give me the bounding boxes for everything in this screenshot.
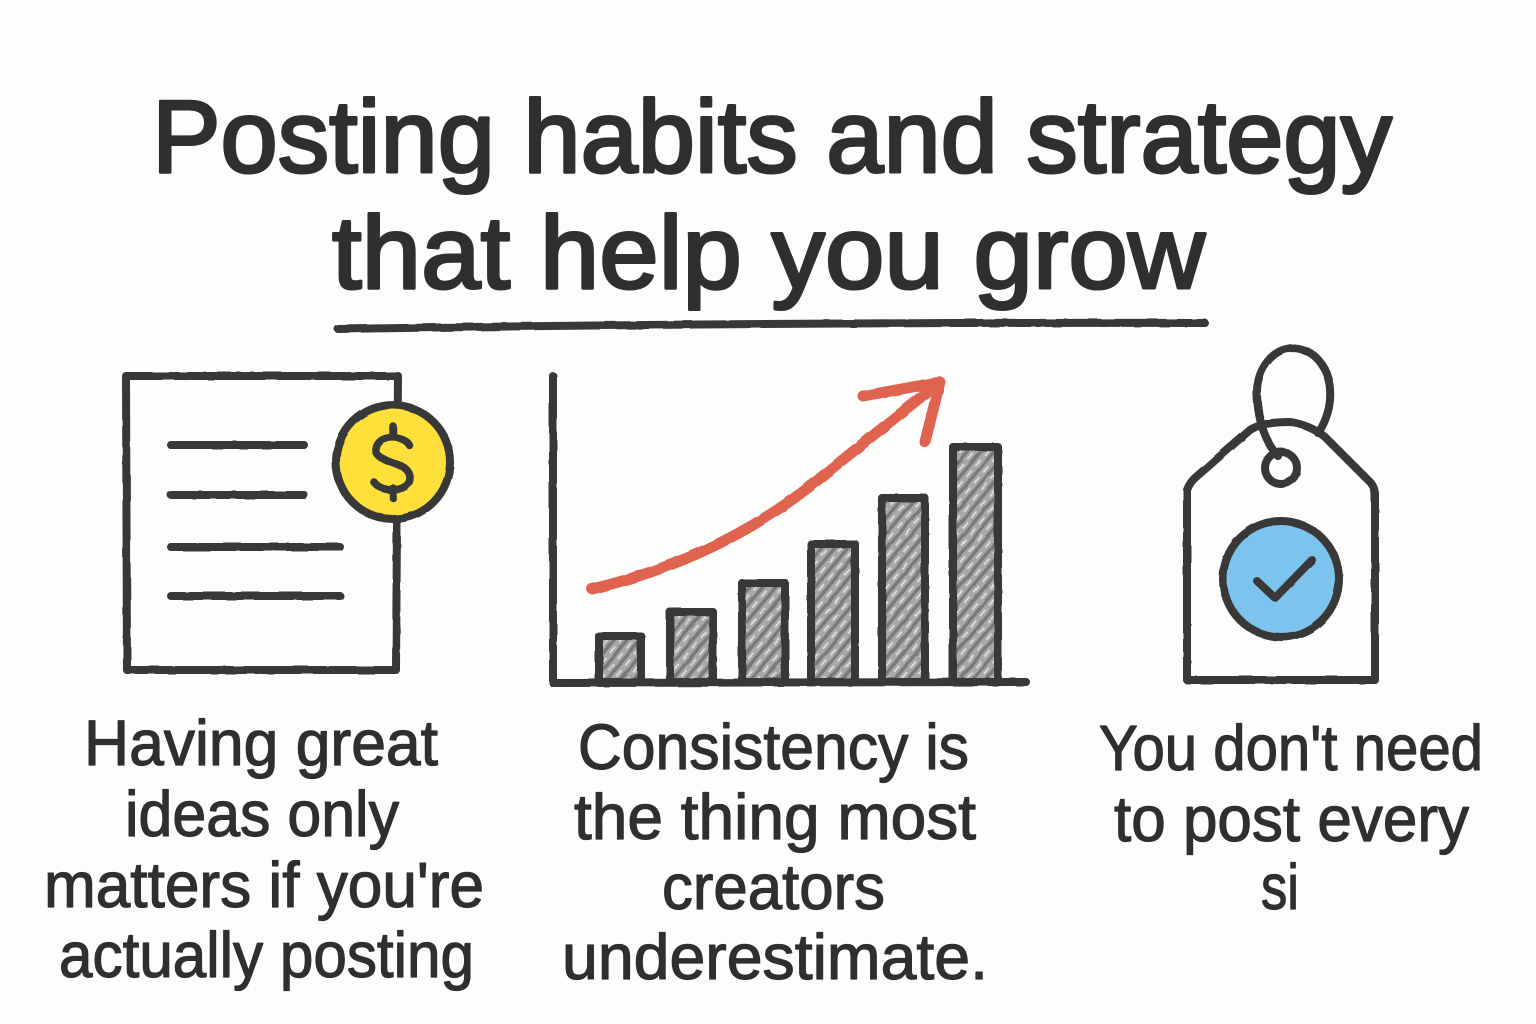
- caption: posting frequency: si: [1261, 851, 1299, 923]
- tag body: [1187, 422, 1375, 680]
- caption: consistency: underestimate.: [562, 921, 988, 993]
- caption: posting frequency: to post every: [1114, 783, 1469, 855]
- title: that help you grow: [332, 195, 1206, 310]
- caption: posting frequency: [1099, 712, 1483, 923]
- chart axes: [553, 376, 1026, 683]
- tag hole: [1265, 452, 1297, 484]
- title: Posting habits and strategy: [152, 79, 1392, 194]
- title: [152, 79, 1392, 310]
- caption: consistency: the thing most: [574, 781, 976, 853]
- document page: [126, 376, 398, 670]
- caption: great ideas: actually posting: [59, 919, 474, 991]
- icon: price tag with check: [1187, 348, 1375, 680]
- caption: great ideas: matters if you're: [44, 849, 484, 921]
- icon: document with dollar coin: [126, 376, 450, 670]
- caption: consistency: Consistency is: [578, 711, 969, 783]
- icon: growth bar chart: [553, 376, 1026, 683]
- caption: great ideas: ideas only: [125, 778, 399, 850]
- dollar coin: [336, 405, 450, 519]
- red growth arrow: [592, 382, 940, 589]
- title underline: [338, 323, 1205, 329]
- tag loop and string: [1257, 348, 1330, 456]
- caption: great ideas: Having great: [84, 707, 438, 779]
- document text lines: [171, 445, 340, 596]
- caption: posting frequency: You don't need: [1099, 712, 1483, 784]
- blue check badge: [1223, 521, 1339, 637]
- caption: consistency: [562, 711, 988, 993]
- caption: consistency: creators: [662, 851, 885, 923]
- chart bars: [599, 447, 998, 682]
- caption: great ideas: [44, 707, 484, 991]
